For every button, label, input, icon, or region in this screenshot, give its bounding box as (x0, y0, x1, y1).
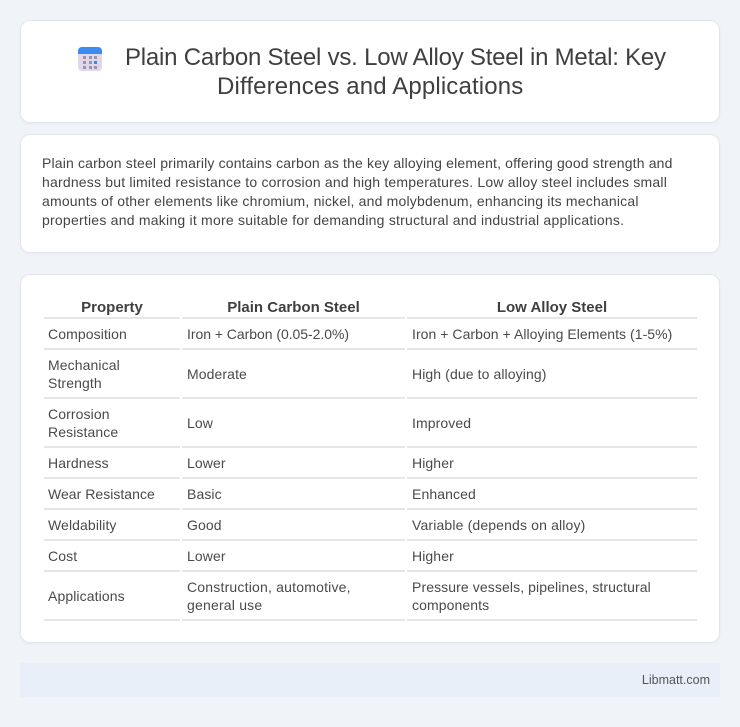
row: Cost: Lower (187, 548, 226, 564)
row: Weldability: Variable (depends on alloy) (412, 517, 585, 533)
row: Wear Resistance (48, 486, 476, 502)
row: Hardness: Hardness (48, 455, 109, 471)
row: Applications: general use (187, 597, 262, 613)
row: Composition (48, 326, 672, 342)
title: Plain Carbon Steel vs. Low Alloy Steel in Metal: Key (125, 44, 666, 71)
row: Mechanical Strength (48, 357, 546, 391)
row: Weldability: Good (187, 517, 222, 533)
row: Weldability (48, 517, 585, 533)
intro text: properties and making it more suitable for demanding structural and industrial applications. (42, 212, 624, 228)
row: Corrosion Resistance: Low (187, 415, 213, 431)
row: Mechanical Strength: High (due to alloying) (412, 366, 546, 382)
row: Mechanical Strength: Strength (48, 375, 102, 391)
row: Wear Resistance: Enhanced (412, 486, 476, 502)
row: Cost: Cost (48, 548, 77, 564)
row: Mechanical Strength: Moderate (187, 366, 247, 382)
row: Corrosion Resistance: Resistance (48, 424, 118, 440)
row: Corrosion Resistance (48, 406, 471, 440)
icon: calendar (78, 47, 102, 71)
intro text: amounts of other elements like chromium, nickel, and molybdenum, enhancing its mechanical (42, 193, 639, 209)
table heading: Plain Carbon Steel: Plain Carbon Steel (227, 299, 360, 316)
header panel (20, 20, 720, 123)
row: Applications: Pressure vessels, pipelines, structural (412, 579, 651, 595)
panel: comparison table (20, 274, 720, 643)
footer text: Libmatt.com (642, 673, 710, 687)
row: Applications (48, 579, 651, 613)
table heading: Property: Property (81, 299, 143, 316)
row: Cost: Higher (412, 548, 454, 564)
row: Applications: Applications (48, 588, 125, 604)
intro text: Plain carbon steel primarily contains carbon as the key alloying element, offering good strength and (42, 155, 673, 171)
row: Weldability: Weldability (48, 517, 117, 533)
row: Composition: Iron + Carbon (0.05-2.0%) (187, 326, 349, 342)
row: Hardness: Higher (412, 455, 454, 471)
row: Applications: components (412, 597, 489, 613)
row: Mechanical Strength: Mechanical (48, 357, 120, 373)
row: Hardness (48, 455, 454, 471)
row: Corrosion Resistance: Corrosion (48, 406, 110, 422)
row: Composition: Composition (48, 326, 127, 342)
row: Composition: Iron + Carbon + Alloying Elements (1-5%) (412, 326, 672, 342)
title: Differences and Applications (217, 73, 523, 100)
table heading: Low Alloy Steel: Low Alloy Steel (497, 299, 607, 316)
intro text (42, 155, 673, 228)
footer bar (20, 663, 720, 697)
row: Applications: Construction, automotive, (187, 579, 351, 595)
title (125, 44, 666, 100)
panel: intro (20, 134, 720, 253)
row: Corrosion Resistance: Improved (412, 415, 471, 431)
row: Cost (48, 548, 454, 564)
row: Wear Resistance: Wear Resistance (48, 486, 155, 502)
intro text: hardness but limited resistance to corrosion and high temperatures. Low alloy steel includes small (42, 174, 667, 190)
row: Hardness: Lower (187, 455, 226, 471)
row: Wear Resistance: Basic (187, 486, 222, 502)
